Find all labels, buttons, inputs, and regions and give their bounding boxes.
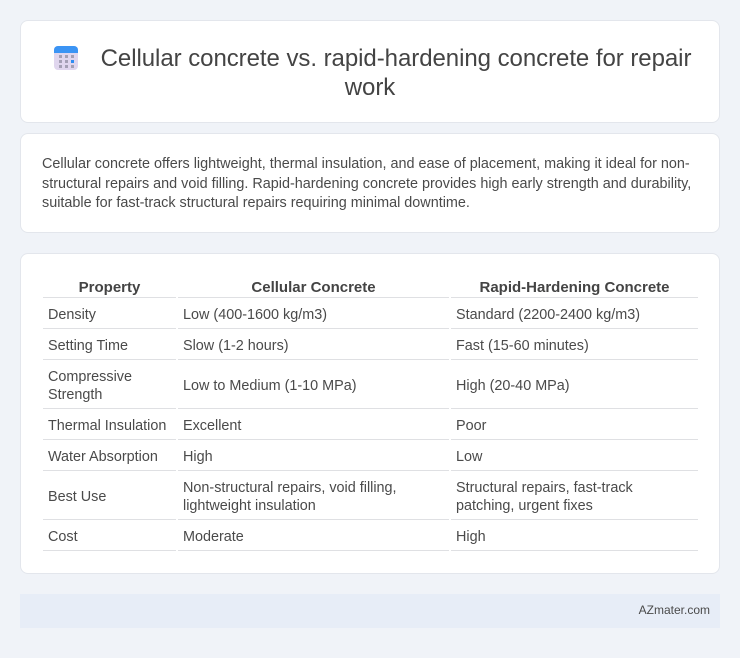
- table header: Cellular Concrete: [251, 279, 376, 296]
- row: water absorption: Water Absorption: [48, 449, 158, 465]
- row: thermal insulation: Poor: [456, 418, 486, 434]
- row: setting time: [43, 328, 698, 354]
- row: compressive strength: Compressive: [48, 369, 132, 385]
- row: best use: Structural repairs, fast-track: [456, 480, 633, 496]
- row: compressive strength: Strength: [48, 387, 102, 403]
- panel: comparison table: [20, 253, 720, 574]
- row: thermal insulation: Thermal Insulation: [48, 418, 166, 434]
- row: best use: [43, 470, 698, 514]
- row: best use: Non-structural repairs, void filling,: [183, 480, 397, 496]
- footer bar: [20, 594, 720, 628]
- row: cost: High: [456, 529, 486, 545]
- footer credit: AZmater.com: [639, 603, 710, 617]
- panel: title card: [20, 20, 720, 123]
- table header: Property: [79, 279, 140, 296]
- row: setting time: Slow (1-2 hours): [183, 338, 289, 354]
- row: setting time: Fast (15-60 minutes): [456, 338, 589, 354]
- panel: summary: [20, 133, 720, 233]
- row: best use: Best Use: [48, 489, 106, 505]
- row: compressive strength: Low to Medium (1-10 MPa): [183, 378, 357, 394]
- table header: [79, 279, 670, 296]
- row: best use: patching, urgent fixes: [456, 498, 593, 514]
- row: compressive strength: [43, 359, 698, 403]
- table header: Rapid-Hardening Concrete: [479, 279, 670, 296]
- row: cost: Cost: [48, 529, 78, 545]
- row: water absorption: Low: [456, 449, 482, 465]
- icon: calendar: [54, 46, 78, 70]
- row: best use: lightweight insulation: [183, 498, 316, 514]
- row: cost: [43, 519, 698, 551]
- row: water absorption: [43, 439, 698, 465]
- row: water absorption: High: [183, 449, 213, 465]
- row: density: [43, 297, 698, 323]
- row: thermal insulation: Excellent: [183, 418, 241, 434]
- row: setting time: Setting Time: [48, 338, 128, 354]
- summary text: Cellular concrete offers lightweight, thermal insulation, and ease of placement, making it ideal for non-structural repairs and void filling. Rapid-hardening concrete provides high early strength and durability, suitable for fast-track structural repairs requiring minimal downtime.: [42, 156, 691, 211]
- row: cost: Moderate: [183, 529, 244, 545]
- title: Cellular concrete vs. rapid-hardening concrete for repair work: [101, 45, 691, 101]
- row: density: Standard (2200-2400 kg/m3): [456, 307, 640, 323]
- row: compressive strength: High (20-40 MPa): [456, 378, 570, 394]
- row: density: Low (400-1600 kg/m3): [183, 307, 327, 323]
- row: thermal insulation: [43, 408, 698, 434]
- row: density: Density: [48, 307, 96, 323]
